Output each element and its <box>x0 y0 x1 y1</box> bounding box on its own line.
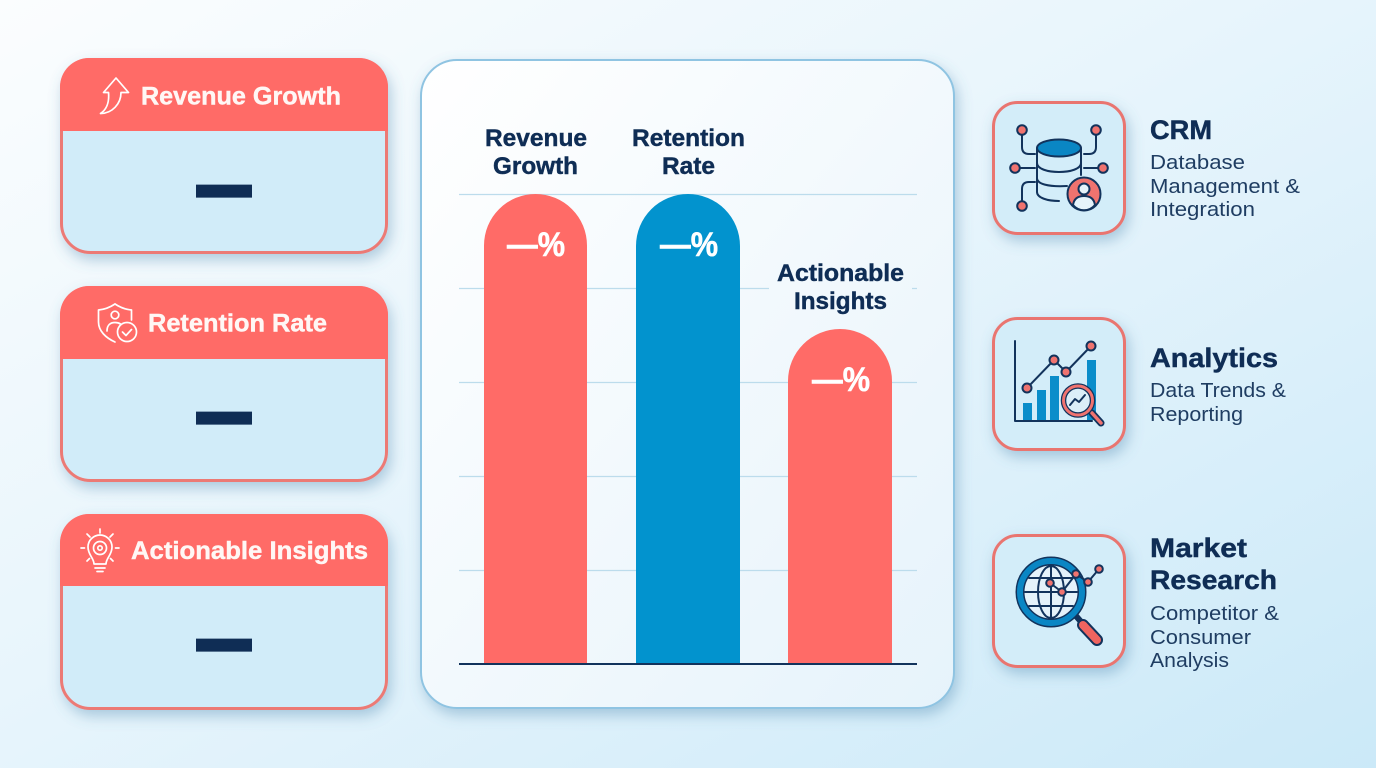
description: analytics: Data Trends & <box>1150 380 1287 402</box>
panel: revenue growth card <box>60 58 388 254</box>
label: retention rate: Rate <box>662 153 715 180</box>
label: retention rate: Retention <box>632 125 745 152</box>
panel: actionable insights card <box>60 514 388 708</box>
label: actionable insights: Insights <box>794 288 887 315</box>
icon: database network with user <box>1010 125 1108 211</box>
panel: bar chart <box>421 60 954 708</box>
heading: retention rate: Retention Rate <box>148 310 327 338</box>
icon: shield with person and check <box>98 304 136 342</box>
heading: analytics: Analytics <box>1150 343 1278 373</box>
heading: market research: Market <box>1150 533 1247 563</box>
description: market research: Competitor & <box>1150 603 1280 625</box>
icon: curved up arrow <box>100 78 128 114</box>
panel: revenue growth card: — <box>196 108 252 254</box>
icon: chart with magnifier <box>1015 341 1101 423</box>
label: revenue growth: Revenue <box>485 125 587 152</box>
description: crm: Management & <box>1150 176 1301 198</box>
bar: actionable insights <box>788 329 892 664</box>
panel: actionable insights card: — <box>196 562 252 708</box>
panel: retention rate card <box>60 286 388 481</box>
bar: retention rate <box>636 194 740 664</box>
heading: revenue growth: Revenue Growth <box>141 82 341 110</box>
bar value: —% <box>507 226 565 264</box>
bar value: —% <box>812 361 870 399</box>
bar value: —% <box>660 226 718 264</box>
panel: market research item <box>994 533 1280 672</box>
description: crm: Database <box>1150 152 1245 174</box>
panel: crm item <box>994 102 1301 234</box>
heading: market research: Research <box>1150 565 1277 595</box>
icon: globe magnifier with trend line <box>1020 561 1103 640</box>
description: market research: Analysis <box>1150 650 1229 672</box>
description: market research: Consumer <box>1150 627 1251 649</box>
panel: retention rate card: — <box>196 335 252 481</box>
label: revenue growth: Growth <box>493 153 578 180</box>
bar: revenue growth <box>484 194 587 664</box>
heading: actionable insights: Actionable Insights <box>131 537 368 565</box>
panel: analytics item <box>994 318 1287 450</box>
description: analytics: Reporting <box>1150 404 1243 426</box>
label: actionable insights: Actionable <box>777 260 904 287</box>
description: crm: Integration <box>1150 199 1255 221</box>
heading: crm: CRM <box>1150 115 1212 145</box>
icon: light bulb with gear <box>81 529 119 572</box>
